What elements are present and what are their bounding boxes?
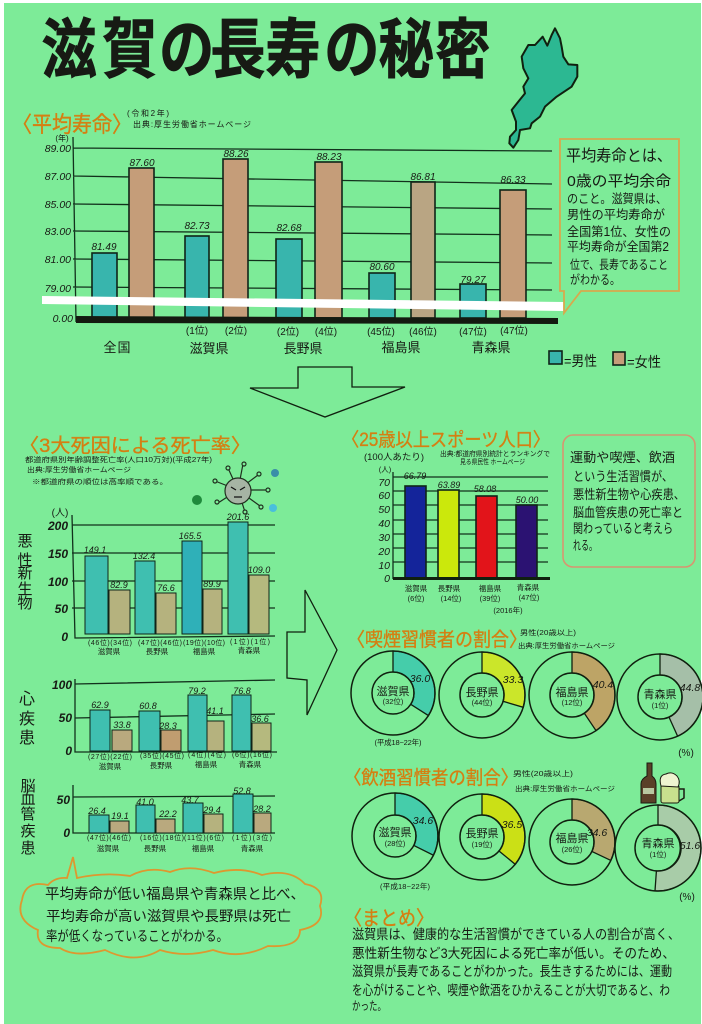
source note: life expectancy: (令和2年) <box>127 108 169 118</box>
donut chart: drinking Aomori: (1位) <box>650 849 667 859</box>
bar chart: life expectancy: 79.00 <box>45 283 71 295</box>
source note: mortality: 出典:厚生労働省ホームページ <box>27 465 131 474</box>
bar chart: heart disease: (35位)(45位) <box>140 751 184 760</box>
donut chart: smoking Fukushima <box>529 652 615 738</box>
bar chart: life expectancy: (2位) <box>277 325 299 338</box>
donut chart: smoking Aomori: (1位) <box>652 700 669 710</box>
icon: bottle and beer mug <box>641 763 684 803</box>
bar chart: malignant neoplasm: 0 <box>61 630 68 644</box>
arrow: right <box>287 590 337 715</box>
bar chart: malignant neoplasm: 長野県 <box>146 647 169 656</box>
label: malignant neoplasm: 悪性新生物 <box>17 533 33 612</box>
donut chart: drinking Fukushima: (26位) <box>562 844 583 854</box>
note: drinking period and unit: (平成18~22年) <box>380 881 430 891</box>
note: drinking period and unit <box>380 881 695 903</box>
bar chart: life expectancy: (45位) <box>367 325 395 338</box>
bar chart: heart disease: (6位)(16位) <box>232 750 272 759</box>
bar chart: sports population: 30 <box>378 532 390 544</box>
callout: definition of life expectancy: のこと。滋賀県は、 <box>567 191 667 206</box>
donut chart: drinking Nagano: 36.5 <box>502 819 522 831</box>
source note: sports population <box>364 449 550 466</box>
bar chart: life expectancy: 87.00 <box>45 171 71 183</box>
bar chart: malignant neoplasm: (人) <box>52 508 68 519</box>
bar chart: heart disease: 33.8 <box>113 720 131 730</box>
source note: drinking <box>513 769 615 793</box>
bar chart: malignant neoplasm: 132.4 <box>133 551 155 561</box>
bar chart: sports population: 50.00 <box>516 495 538 505</box>
callout: definition of life expectancy: 平均寿命とは、 <box>566 147 672 165</box>
bar chart: cerebrovascular disease: 0 <box>63 826 70 840</box>
bar chart: cerebrovascular disease: 長野県 <box>144 844 167 853</box>
callout: definition of life expectancy: 平均寿命が全国第2 <box>567 239 669 254</box>
bar chart: life expectancy: (46位) <box>409 325 437 338</box>
panel: lifestyle habits note: という生活習慣が、 <box>573 469 673 484</box>
donut chart: smoking Shiga: 36.0 <box>410 673 430 685</box>
bar chart: life expectancy: 青森県 <box>471 340 511 355</box>
source note: smoking: 出典:厚生労働省ホームページ <box>518 641 615 650</box>
callout: definition of life expectancy: 男性の平均寿命が <box>567 207 665 222</box>
bar chart: heart disease: 滋賀県 <box>99 761 122 771</box>
bar chart: sports population <box>377 465 550 615</box>
heading: three major causes of death: 〈3大死因による死亡率〉 <box>19 435 251 457</box>
callout: definition of life expectancy: がわかる。 <box>570 272 620 287</box>
bar chart: malignant neoplasm: (19位)(10位) <box>183 638 225 647</box>
bar chart: cerebrovascular disease: 26.4 <box>87 806 106 816</box>
donut chart: smoking Nagano: (44位) <box>472 697 493 707</box>
bar chart: life expectancy: 長野県 <box>283 341 323 356</box>
note: smoking period and unit: (平成18~22年) <box>374 737 422 747</box>
bar chart: life expectancy: 85.00 <box>45 199 71 211</box>
text block: summary: かった。 <box>352 999 386 1013</box>
bar chart: heart disease: (27位)(22位) <box>88 752 132 761</box>
icon: virus <box>192 462 279 514</box>
bar chart: sports population: (47位) <box>519 592 540 602</box>
bar chart: cerebrovascular disease: 41.0 <box>136 797 154 807</box>
donut chart: smoking Aomori <box>617 654 702 740</box>
bar chart: life expectancy: 82.73 <box>184 221 210 232</box>
donut chart: drinking Nagano: 長野県 <box>466 827 498 840</box>
bar chart: heart disease: 100 <box>52 678 72 692</box>
heading: smoking: 〈喫煙習慣者の割合〉 <box>347 629 527 651</box>
bar chart: life expectancy: 88.26 <box>223 149 249 160</box>
source note: life expectancy <box>127 108 251 129</box>
bar chart: sports population: 66.79 <box>404 471 426 481</box>
panel: lifestyle habits note <box>563 435 695 567</box>
donut chart: drinking Fukushima: 福島県 <box>556 831 588 845</box>
bar chart: cerebrovascular disease: 福島県 <box>192 843 215 853</box>
bar chart: life expectancy: (47位) <box>459 325 487 338</box>
bar chart: sports population: (人) <box>379 465 392 474</box>
bar chart: heart disease: 0 <box>65 744 72 758</box>
source note: smoking: 男性(20歳以上) <box>520 628 576 637</box>
callout: cloud comparison: 率が低くなっていることがわかる。 <box>46 928 228 944</box>
bar chart: cerebrovascular disease: 青森県 <box>241 843 264 853</box>
bar chart: malignant neoplasm: 89.9 <box>203 579 221 589</box>
bar chart: life expectancy: 80.60 <box>369 262 395 273</box>
bar chart: cerebrovascular disease <box>57 785 275 853</box>
bar chart: heart disease: 青森県 <box>239 759 262 769</box>
bar chart: malignant neoplasm: 滋賀県 <box>98 646 121 656</box>
bar chart: heart disease: 36.6 <box>251 714 269 724</box>
bar chart: malignant neoplasm: 76.6 <box>157 583 175 593</box>
bar chart: malignant neoplasm: 109.0 <box>248 565 270 575</box>
bar chart: sports population: (14位) <box>441 593 462 603</box>
bar chart: heart disease: 76.8 <box>233 686 251 696</box>
callout: cloud comparison: 平均寿命が高い滋賀県や長野県は死亡 <box>46 908 291 924</box>
bar chart: sports population: (6位) <box>408 593 425 603</box>
donut chart: smoking Shiga: 滋賀県 <box>376 685 410 698</box>
bar chart: malignant neoplasm: 149.1 <box>84 545 106 555</box>
bar chart: malignant neoplasm: 50 <box>55 602 68 616</box>
bar chart: cerebrovascular disease: 50 <box>57 793 70 807</box>
bar chart: life expectancy: (2位) <box>225 324 247 337</box>
heading: drinking: 〈飲酒習慣者の割合〉 <box>344 767 518 789</box>
bar chart: life expectancy <box>42 133 564 356</box>
bar chart: malignant neoplasm: 200 <box>47 519 68 533</box>
source note: sports population: (100人あたり) <box>364 452 424 462</box>
bar chart: cerebrovascular disease: 43.7 <box>181 795 200 805</box>
callout: definition of life expectancy: 全国第1位、女性の <box>567 224 671 239</box>
donut chart: smoking Fukushima: 福島県 <box>556 685 588 699</box>
bar chart: malignant neoplasm: 165.5 <box>179 531 202 541</box>
bar chart: life expectancy: (年) <box>55 133 69 143</box>
bar chart: life expectancy: 滋賀県 <box>189 341 229 356</box>
donut chart: smoking Shiga <box>351 651 435 735</box>
bar chart: life expectancy: 81.49 <box>91 242 117 253</box>
bar chart: sports population: 63.89 <box>438 480 460 490</box>
bar chart: malignant neoplasm: (46位)(34位) <box>88 638 132 647</box>
bar chart: life expectancy: (47位) <box>500 324 528 337</box>
callout: definition of life expectancy: 0歳の平均余命 <box>567 173 671 190</box>
source note: sports population: 出典:都道府県別統計とランキングで <box>440 449 550 458</box>
bar chart: malignant neoplasm: 100 <box>48 575 68 589</box>
bar chart: cerebrovascular disease: 52.8 <box>233 786 251 796</box>
bar chart: life expectancy: 86.81 <box>410 172 436 183</box>
bar chart: cerebrovascular disease: (1位)(3位) <box>232 833 272 842</box>
panel: lifestyle habits note: 運動や喫煙、飲酒 <box>570 450 675 465</box>
panel: lifestyle habits note: 悪性新生物や心疾患、 <box>573 487 685 502</box>
bar chart: sports population: 福島県 <box>479 583 502 593</box>
bar chart: sports population: 20 <box>377 546 390 558</box>
bar chart: malignant neoplasm: (47位)(46位) <box>138 638 182 647</box>
bar chart: life expectancy: 89.00 <box>45 143 71 155</box>
bar chart: life expectancy: 86.33 <box>500 175 526 186</box>
donut chart: smoking Fukushima: (12位) <box>562 697 583 707</box>
bar chart: cerebrovascular disease: 28.2 <box>252 804 271 814</box>
donut chart: drinking Nagano <box>439 794 525 880</box>
bar chart: heart disease: 79.2 <box>188 686 206 696</box>
bar chart: malignant neoplasm: 青森県 <box>238 645 261 655</box>
label: cerebrovascular disease: 脳血管疾患 <box>20 778 36 857</box>
panel: lifestyle habits note: 脳血管疾患の死亡率と <box>573 505 683 520</box>
bar chart: sports population: 滋賀県 <box>405 583 428 593</box>
bar chart: heart disease: 60.8 <box>139 701 157 711</box>
bar chart: sports population: 50 <box>378 504 390 516</box>
donut chart: smoking Aomori: 44.8 <box>680 682 700 694</box>
donut chart: drinking Aomori: 青森県 <box>642 836 674 850</box>
source note: drinking: 出典:厚生労働省ホームページ <box>515 784 615 793</box>
bar chart: cerebrovascular disease: 滋賀県 <box>97 843 120 853</box>
bar chart: sports population: 60 <box>378 490 390 502</box>
bar chart: cerebrovascular disease: (47位)(46位) <box>87 833 131 842</box>
bar chart: life expectancy: 88.23 <box>316 152 342 163</box>
bar chart: heart disease: 62.9 <box>91 700 109 710</box>
source note: drinking: 男性(20歳以上) <box>513 769 573 778</box>
bar chart: life expectancy: 83.00 <box>45 226 71 238</box>
bar chart: sports population: 青森県 <box>517 582 540 592</box>
panel: lifestyle habits note: 関わっていると考えら <box>573 521 673 536</box>
donut chart: smoking Fukushima: 40.4 <box>593 679 613 691</box>
bar chart: cerebrovascular disease: 19.1 <box>111 811 129 821</box>
panel: lifestyle habits note: れる。 <box>573 538 597 553</box>
bar chart: sports population: 0 <box>384 573 390 585</box>
bar chart: life expectancy: 79.27 <box>460 275 486 286</box>
heading: summary: 〈まとめ〉 <box>344 908 434 930</box>
icon: Shiga prefecture map <box>509 28 577 148</box>
legend: male / female <box>549 351 661 370</box>
note: smoking period and unit <box>374 737 694 759</box>
bar chart: life expectancy: 82.68 <box>276 223 302 234</box>
bar chart: life expectancy: (4位) <box>315 325 337 338</box>
bar chart: life expectancy: 87.60 <box>129 158 155 169</box>
donut chart: drinking Fukushima <box>529 799 615 885</box>
donut chart: drinking Shiga: (28位) <box>385 838 406 848</box>
bar chart: malignant neoplasm: 82.9 <box>110 580 128 590</box>
title: 滋賀の長寿の秘密 <box>41 14 490 86</box>
text block: summary: 悪性新生物など3大死因による死亡率が低い。そのため、 <box>352 946 675 961</box>
bar chart: malignant neoplasm <box>47 508 275 656</box>
donut chart: smoking Nagano <box>439 652 525 738</box>
bar chart: sports population: 長野県 <box>438 584 461 593</box>
bar chart: malignant neoplasm: 201.6 <box>226 512 249 522</box>
bar chart: cerebrovascular disease: (16位)(18位) <box>140 833 184 842</box>
source note: sports population: 見る県民性 ホームページ <box>460 457 525 466</box>
donut chart: smoking Aomori: 青森県 <box>644 687 676 701</box>
bar chart: malignant neoplasm: (1位)(1位) <box>230 637 270 646</box>
bar chart: sports population: 10 <box>378 560 390 572</box>
note: smoking period and unit: (%) <box>678 748 694 759</box>
bar chart: sports population: 58.08 <box>474 484 496 494</box>
bar chart: heart disease: 50 <box>59 711 72 725</box>
bar chart: life expectancy: 81.00 <box>45 254 71 266</box>
bar chart: cerebrovascular disease: (11位)(6位) <box>184 833 224 842</box>
donut chart: smoking Shiga: (32位) <box>383 696 404 706</box>
label: heart disease: 心疾患 <box>19 690 35 747</box>
bar chart: life expectancy: 福島県 <box>381 340 421 355</box>
arrow: down <box>250 367 405 417</box>
bar chart: life expectancy: 0.00 <box>53 313 73 325</box>
donut chart: drinking Nagano: (19位) <box>472 839 493 849</box>
donut chart: smoking Nagano: 長野県 <box>466 686 498 699</box>
bar chart: sports population: 40 <box>378 518 390 530</box>
donut chart: drinking Shiga: 滋賀県 <box>378 826 412 839</box>
donut chart: drinking Shiga <box>352 793 438 879</box>
source note: mortality <box>25 455 212 486</box>
bar chart: life expectancy: 全国 <box>104 340 130 355</box>
donut chart: drinking Fukushima: 34.6 <box>587 827 607 839</box>
heading: average life expectancy: 〈平均寿命〉 <box>12 112 132 137</box>
legend: male / female: =男性 <box>564 353 597 369</box>
callout: cloud comparison: 平均寿命が低い福島県や青森県と比べ、 <box>45 886 305 903</box>
bar chart: heart disease <box>52 678 277 771</box>
donut chart: drinking Aomori <box>615 805 701 891</box>
source note: smoking <box>518 628 615 650</box>
source note: mortality: 都道府県別年齢調整死亡率(人口10万対)(平成27年) <box>25 455 212 464</box>
bar chart: heart disease: 28.3 <box>158 721 177 731</box>
bar chart: malignant neoplasm: 150 <box>48 547 68 561</box>
bar chart: heart disease: 福島県 <box>195 759 218 769</box>
bar chart: sports population: (39位) <box>480 593 501 603</box>
legend: male / female: =女性 <box>627 354 661 370</box>
callout: definition of life expectancy <box>560 139 679 313</box>
donut chart: drinking Aomori: 51.6 <box>680 840 700 852</box>
bar chart: cerebrovascular disease: 29.4 <box>202 805 221 815</box>
bar chart: heart disease: 長野県 <box>150 761 173 770</box>
bar chart: life expectancy: (1位) <box>186 324 208 337</box>
bar chart: sports population: 70 <box>378 477 390 489</box>
source note: mortality: ※都道府県の順位は高率順である。 <box>32 477 168 486</box>
callout: definition of life expectancy: 位で、長寿であること <box>570 258 668 272</box>
source note: life expectancy: 出典:厚生労働省ホームページ <box>133 119 251 129</box>
bar chart: heart disease: (4位)(4位) <box>188 750 226 759</box>
bar chart: malignant neoplasm: 福島県 <box>193 646 216 656</box>
bar chart: cerebrovascular disease: 22.2 <box>158 809 177 819</box>
callout: cloud comparison <box>20 857 321 958</box>
bar chart: heart disease: 41.1 <box>206 706 224 716</box>
text block: summary <box>352 926 680 1013</box>
heading: sports population: 〈25歳以上スポーツ人口〉 <box>342 429 550 451</box>
donut chart: smoking Nagano: 33.3 <box>503 674 523 686</box>
bar chart: sports population: (2016年) <box>493 605 523 615</box>
note: drinking period and unit: (%) <box>679 892 695 903</box>
donut chart: drinking Shiga: 34.6 <box>413 815 433 827</box>
